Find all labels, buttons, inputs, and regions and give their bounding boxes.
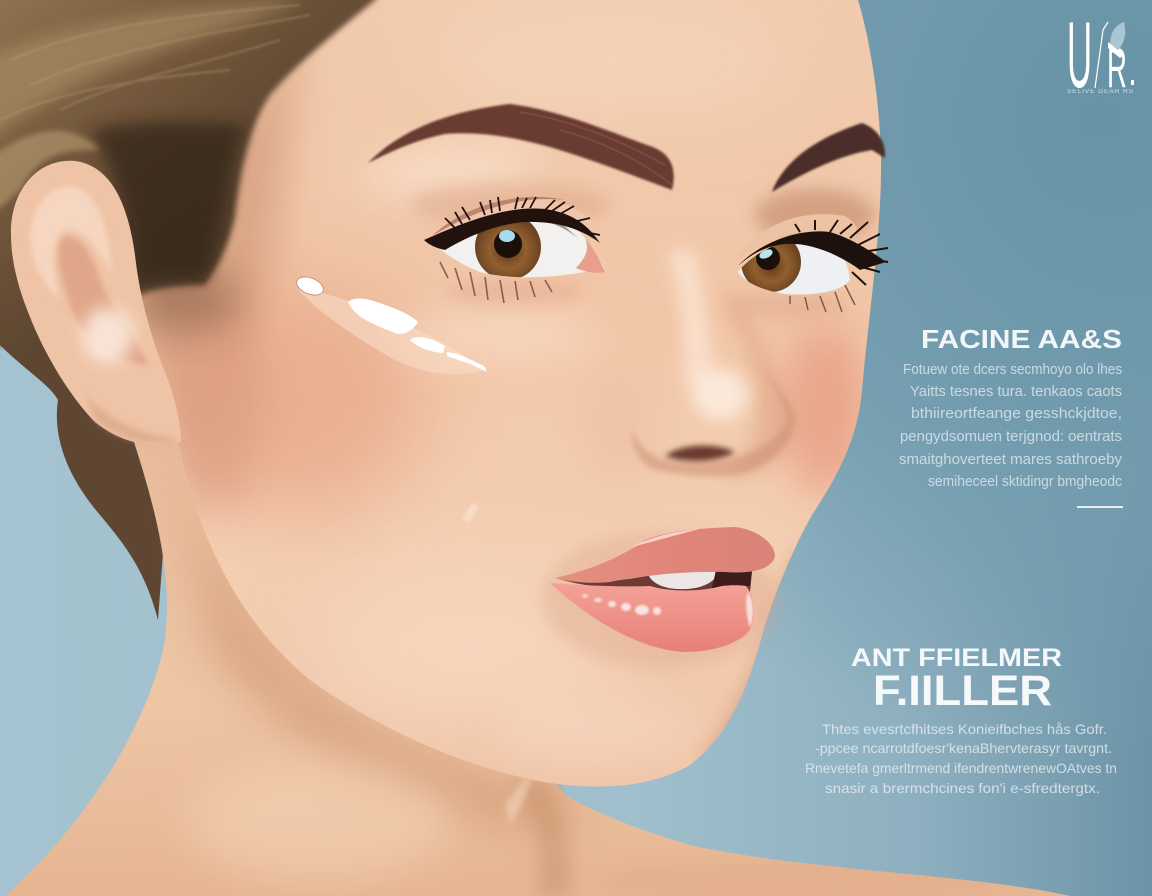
iris xyxy=(475,222,578,278)
eyebrow: left xyxy=(368,104,674,190)
eye: right xyxy=(735,214,888,312)
eyelid xyxy=(436,199,600,240)
text block: lower description: Rnevetefa gmerltrmend ifendrentwrenewOAtves tn xyxy=(805,760,1117,776)
text block: lower description: Thtes evesrtcfhitses Konieifbches hås Gofr. xyxy=(822,721,1107,737)
text block: upper description: semiheceel sktidingr bmgheodc xyxy=(928,474,1122,490)
logo: SELIVE DEAR RS xyxy=(1067,89,1134,95)
logo: U xyxy=(1067,2,1092,107)
upper lip xyxy=(555,527,775,583)
cream streak xyxy=(294,273,488,522)
heading: filler: F.IILLER xyxy=(873,667,1052,715)
eye: left xyxy=(424,197,605,303)
text block: upper description: Yaitts tesnes tura. tenkaos caots xyxy=(910,384,1122,400)
mouth and teeth xyxy=(556,565,752,592)
text block: lower description: -ppcee ncarrotdfoesr'kenaBhervterasyr tavrgnt. xyxy=(815,740,1112,756)
lower lashes xyxy=(790,285,855,312)
heading: facine aas: FACINE AA&S xyxy=(921,324,1122,354)
nose xyxy=(590,250,795,485)
back hair bun xyxy=(0,290,170,620)
face xyxy=(120,0,881,787)
skin shading xyxy=(120,10,875,765)
neck and shoulder xyxy=(5,400,1070,896)
iris xyxy=(742,244,801,292)
ear xyxy=(11,161,181,445)
upper lash line xyxy=(738,231,886,270)
text block: upper description: smaitghoverteet mares sathroeby xyxy=(899,452,1123,468)
eyebrow: right xyxy=(772,123,885,192)
upper lash line xyxy=(424,208,600,250)
text block: lower description: snasir a brermchcines fon'i e-sfredtergtx. xyxy=(825,780,1100,796)
text block: upper description: pengydsomuen terjgnod: oentrats xyxy=(900,429,1122,445)
nostril xyxy=(665,446,735,461)
lower lip xyxy=(550,583,754,652)
eyelid xyxy=(735,214,857,262)
divider rule xyxy=(1077,506,1123,508)
text block: upper description xyxy=(899,362,1123,490)
lips xyxy=(542,527,778,668)
logo xyxy=(1067,2,1134,107)
front hair xyxy=(0,0,420,345)
eye socket shading xyxy=(410,183,610,227)
text block: lower description xyxy=(805,721,1117,796)
text block: upper description: bthiireortfeange gesshckjdtoe, xyxy=(911,406,1122,422)
inner corner xyxy=(576,238,605,273)
lower lashes xyxy=(440,262,552,303)
text block: upper description: Fotuew ote dcers secmhoyo olo lhes xyxy=(903,362,1122,378)
heading: ant fielmer: ANT FFIELMER xyxy=(851,644,1062,672)
logo: R xyxy=(1107,36,1127,100)
